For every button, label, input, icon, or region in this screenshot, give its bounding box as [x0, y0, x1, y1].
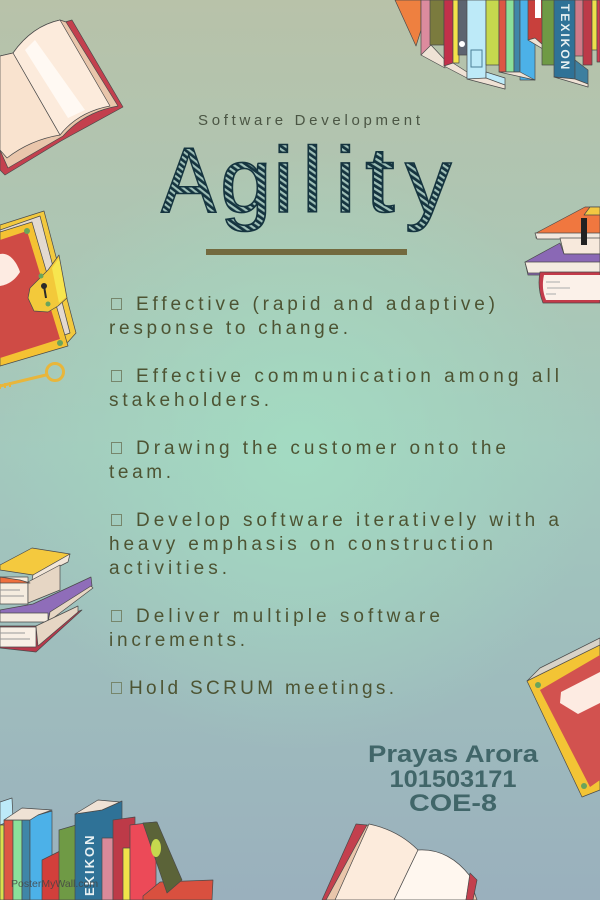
title: Agility: i: [273, 128, 294, 232]
text block: bullet list: Drawing the customer onto the: [136, 438, 506, 459]
title: Agility: g: [220, 128, 272, 232]
text: spine lettering: TEXIKON: [558, 4, 572, 71]
text block: bullet list: heavy emphasis on construction: [109, 534, 493, 555]
title: Agility: A: [161, 127, 216, 232]
text block: author: [368, 741, 539, 817]
title: Agility: l: [302, 128, 323, 232]
text block: bullet list: Effective communication among all: [136, 366, 559, 387]
title: Agility: y: [405, 128, 452, 232]
text block: bullet list: increments.: [109, 630, 245, 651]
text block: author: 101503171: [390, 766, 516, 793]
text: spine lettering: EKIKON: [82, 833, 97, 896]
text block: bullet list: Deliver multiple software: [136, 606, 440, 627]
text block: bullet list: stakeholders.: [109, 390, 269, 411]
title: Agility: [161, 127, 452, 232]
heading: Software Development: Software Development: [198, 112, 421, 129]
text block: bullet list: Effective (rapid and adaptive): [136, 294, 495, 315]
text block: bullet list: activities.: [109, 558, 227, 579]
text block: bullet list: Hold SCRUM meetings.: [129, 678, 394, 699]
text block: bullet list: Develop software iteratively with a: [136, 510, 559, 531]
icon: book spines bottom left: [0, 798, 213, 900]
text block: bullet list: response to change.: [109, 318, 348, 339]
text block: bullet list: team.: [109, 462, 171, 483]
icon: key: [0, 364, 64, 389]
text block: author: Prayas Arora: [368, 741, 539, 768]
icon: book stack right: [525, 207, 600, 303]
icon: book stack left: [0, 548, 93, 652]
icon: open book bottom: [322, 824, 477, 900]
text block: author: COE-8: [409, 790, 497, 817]
title: Agility: i: [335, 128, 356, 232]
text block: bullet list: [109, 294, 559, 699]
icon: book spines top right: [395, 0, 600, 89]
watermark: PosterMyWall.com: [11, 878, 98, 890]
icon: open book top left: [0, 20, 123, 175]
divider rule: [206, 249, 407, 255]
icon: red book right: [527, 638, 600, 797]
title: Agility: t: [365, 128, 395, 232]
icon: locked red book: [0, 211, 76, 366]
